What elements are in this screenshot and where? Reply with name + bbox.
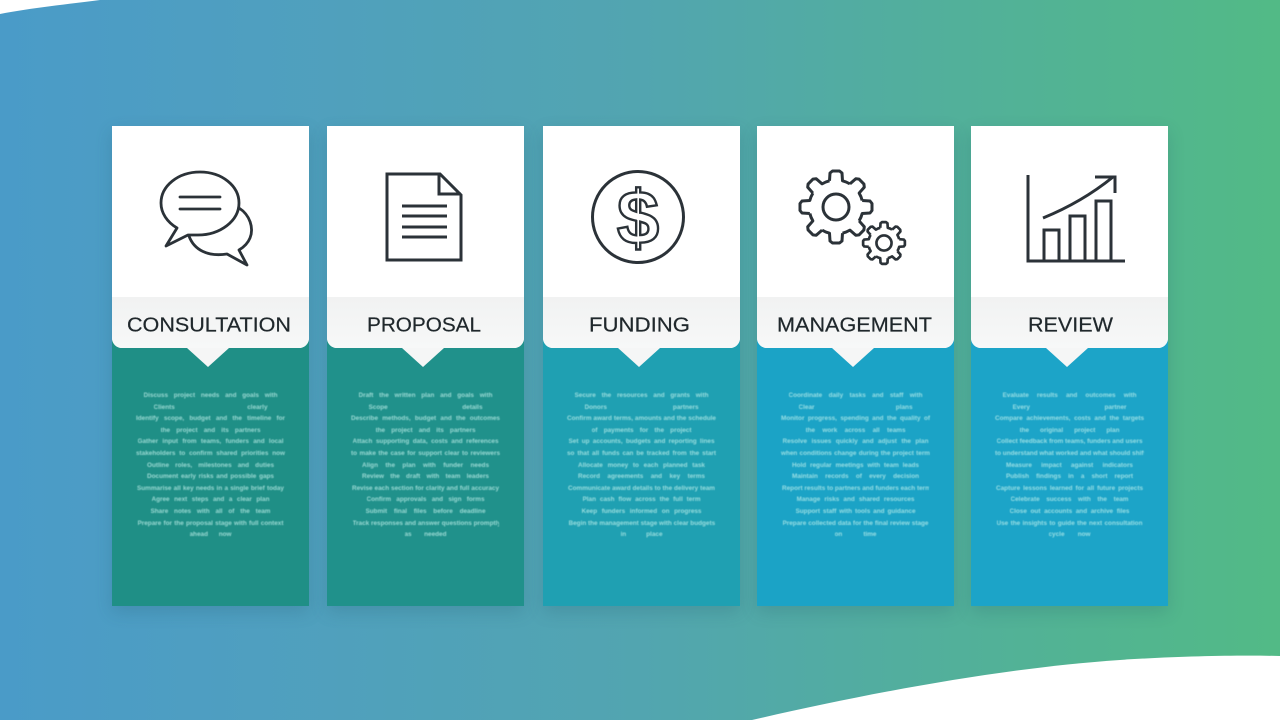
text block: consultation details: [136, 392, 286, 538]
text block: review details: Capture lessons learned for all future projects: [996, 485, 1143, 492]
text block: funding details: Donors partners: [584, 404, 698, 411]
text block: funding details: Keep funders informed on progress: [582, 508, 702, 515]
text block: funding details: Confirm award terms, amounts and the schedule: [567, 415, 716, 422]
text block: review details: [994, 392, 1144, 538]
text block: funding details: Begin the management stage with clear budgets: [568, 520, 714, 527]
text block: funding details: Plan cash flow across the full term: [582, 496, 700, 503]
text block: management details: Support staff with tools and guidance: [796, 508, 916, 515]
text block: funding details: Record agreements and key terms: [578, 473, 705, 480]
text block: proposal details: Scope details: [368, 404, 482, 411]
icon: speech bubbles: [160, 170, 253, 266]
text block: management details: on time: [834, 531, 876, 538]
text block: proposal details: Track responses and answer questions promptly: [352, 520, 498, 527]
text block: funding details: Communicate award details to the delivery team: [568, 485, 715, 492]
text block: funding details: Allocate money to each planned task: [578, 462, 705, 469]
text block: management details: when conditions change during the project term: [781, 450, 930, 457]
text block: proposal details: Review the draft with team leaders: [362, 473, 489, 480]
label: proposal: PROPOSAL: [367, 314, 481, 336]
text block: review details: Compare achievements, costs and the targets: [995, 415, 1144, 422]
text block: review details: the original project plan: [1020, 427, 1120, 434]
icon: document: [386, 172, 462, 262]
text block: proposal details: Submit final files before deadline: [366, 508, 486, 515]
text block: review details: cycle now: [1048, 531, 1090, 538]
text block: management details: Prepare collected data for the final review stage: [782, 520, 928, 527]
panel: funding: [543, 126, 740, 606]
text block: proposal details: Describe methods, budget and the outcomes: [351, 415, 500, 422]
text block: management details: Maintain records of every decision: [792, 473, 919, 480]
text block: management details: the work across all teams: [806, 427, 906, 434]
text block: management details: Report results to partners and funders each term: [782, 485, 929, 492]
text block: consultation details: ahead now: [190, 531, 232, 538]
text block: review details: to understand what worked and what should shift: [995, 450, 1144, 457]
text block: management details: [780, 392, 930, 538]
icon: growth chart: [1026, 175, 1125, 262]
text block: consultation details: the project and its partners: [160, 427, 260, 434]
text block: funding details: so that all funds can be tracked from the start: [567, 450, 716, 457]
text block: consultation details: Summarise all key needs in a single brief today: [137, 485, 284, 492]
panel: review: [971, 126, 1168, 606]
text block: review details: Measure impact against indicators: [1006, 462, 1133, 469]
panel: consultation: [112, 126, 309, 606]
text block: review details: Publish findings in a short report: [1006, 473, 1133, 480]
label: consultation: CONSULTATION: [127, 314, 291, 336]
text block: proposal details: Revise each section for clarity and full accuracy: [352, 485, 499, 492]
text block: proposal details: [350, 392, 500, 538]
label: management: MANAGEMENT: [777, 314, 932, 336]
text block: review details: Close out accounts and archive files: [1010, 508, 1130, 515]
text block: management details: Coordinate daily tasks and staff with: [788, 392, 922, 399]
text block: funding details: Set up accounts, budgets and reporting lines: [568, 438, 714, 445]
text block: funding details: Secure the resources and grants with: [574, 392, 708, 399]
text block: funding details: [566, 392, 716, 538]
text block: consultation details: Gather input from teams, funders and local: [138, 438, 284, 445]
text block: consultation details: Outline roles, milestones and duties: [147, 462, 274, 469]
text block: consultation details: Identify scope, budget and the timeline for: [136, 415, 285, 422]
text block: proposal details: as needed: [404, 531, 446, 538]
text block: funding details: in place: [620, 531, 662, 538]
text block: funding details: of payments for the project: [592, 427, 692, 434]
icon: gears: [798, 170, 906, 266]
label: review: REVIEW: [1028, 314, 1113, 336]
text block: review details: Collect feedback from teams, funders and users: [996, 438, 1142, 445]
text block: consultation details: Share notes with all of the team: [150, 508, 270, 515]
text block: consultation details: Clients clearly: [154, 404, 268, 411]
panel: management: [757, 126, 954, 606]
text block: consultation details: Prepare for the proposal stage with full context: [138, 520, 284, 527]
text block: consultation details: Document early risks and possible gaps: [147, 473, 274, 480]
text block: proposal details: Attach supporting data, costs and references: [352, 438, 498, 445]
panel: proposal: [327, 126, 524, 606]
text block: proposal details: Confirm approvals and sign forms: [366, 496, 484, 503]
icon: dollar coin: $: [617, 176, 659, 261]
text block: proposal details: the project and its partners: [376, 427, 476, 434]
text block: proposal details: to make the case for support clear to reviewers: [351, 450, 500, 457]
text block: consultation details: Discuss project needs and goals with: [144, 392, 278, 399]
text block: proposal details: Align the plan with funder needs: [362, 462, 489, 469]
text block: proposal details: Draft the written plan and goals with: [358, 392, 492, 399]
label: funding: FUNDING: [589, 314, 690, 336]
text block: consultation details: stakeholders to confirm shared priorities now: [136, 450, 285, 457]
text block: review details: Use the insights to guide the next consultation: [996, 520, 1142, 527]
icon: dollar coin: [591, 170, 685, 264]
text block: management details: Clear plans: [798, 404, 912, 411]
text block: review details: Celebrate success with the team: [1010, 496, 1128, 503]
text block: management details: Resolve issues quickly and adjust the plan: [782, 438, 928, 445]
text block: management details: Manage risks and shared resources: [796, 496, 914, 503]
text block: review details: Evaluate results and outcomes with: [1002, 392, 1136, 399]
text block: review details: Every partner: [1012, 404, 1126, 411]
text block: management details: Hold regular meetings with team leads: [792, 462, 919, 469]
text block: consultation details: Agree next steps and a clear plan: [152, 496, 270, 503]
text block: management details: Monitor progress, spending and the quality of: [781, 415, 930, 422]
